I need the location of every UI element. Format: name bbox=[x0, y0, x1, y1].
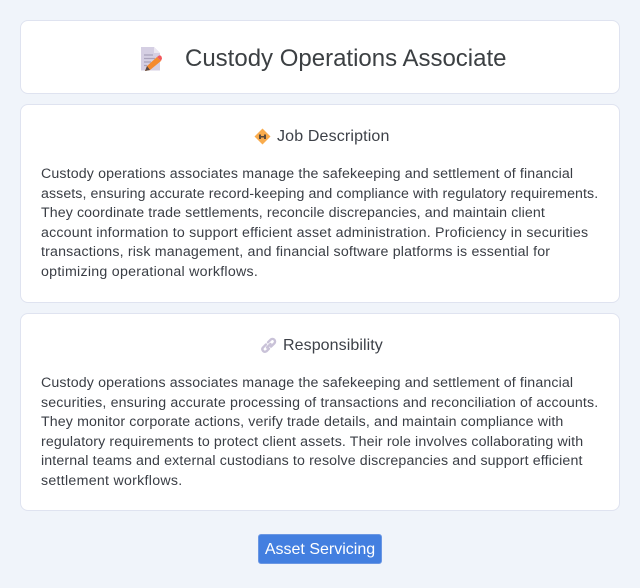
text block: responsibility: Custody operations associates manage the safekeeping and settlement of financial bbox=[41, 375, 573, 391]
heading: job description: Job Description bbox=[277, 128, 390, 145]
text block: responsibility bbox=[41, 375, 598, 488]
text block: job description: account information to support efficient asset administration. Proficiency in securities bbox=[41, 224, 588, 240]
text block: responsibility: settlement workflows. bbox=[41, 472, 182, 488]
text block: job description: transactions, risk management, and financial software platforms is essential for bbox=[41, 244, 550, 260]
text block: job description: Custody operations associates manage the safekeeping and settlement of financial bbox=[41, 166, 573, 182]
icon: road sign diamond bbox=[254, 128, 270, 144]
title: Custody Operations Associate bbox=[185, 45, 507, 72]
text block: responsibility: regulatory requirements to protect client assets. Their role involves collaborating with bbox=[41, 434, 583, 450]
text block: job description: assets, ensuring accurate record-keeping and compliance with regulatory requirements. bbox=[41, 186, 598, 202]
icon: chain link bbox=[261, 338, 276, 353]
button: asset servicing bbox=[258, 534, 382, 564]
text block: job description bbox=[41, 166, 598, 280]
panel: responsibility bbox=[20, 313, 620, 511]
heading: responsibility: Responsibility bbox=[283, 337, 383, 354]
text block: responsibility: securities, ensuring accurate processing of transactions and reconciliation of accounts. bbox=[41, 394, 598, 410]
panel: title card bbox=[20, 20, 620, 94]
panel: job description bbox=[20, 104, 620, 303]
icon: document with pencil bbox=[141, 47, 162, 71]
text block: responsibility: internal teams and external custodians to resolve discrepancies and support efficient bbox=[41, 453, 583, 469]
button: asset servicing: Asset Servicing bbox=[265, 541, 375, 558]
text block: responsibility: They monitor corporate actions, verify trade details, and maintain compliance with bbox=[41, 414, 563, 430]
text block: job description: optimizing operational workflows. bbox=[41, 264, 258, 280]
text block: job description: They coordinate trade settlements, reconcile discrepancies, and maintain client bbox=[41, 205, 545, 221]
